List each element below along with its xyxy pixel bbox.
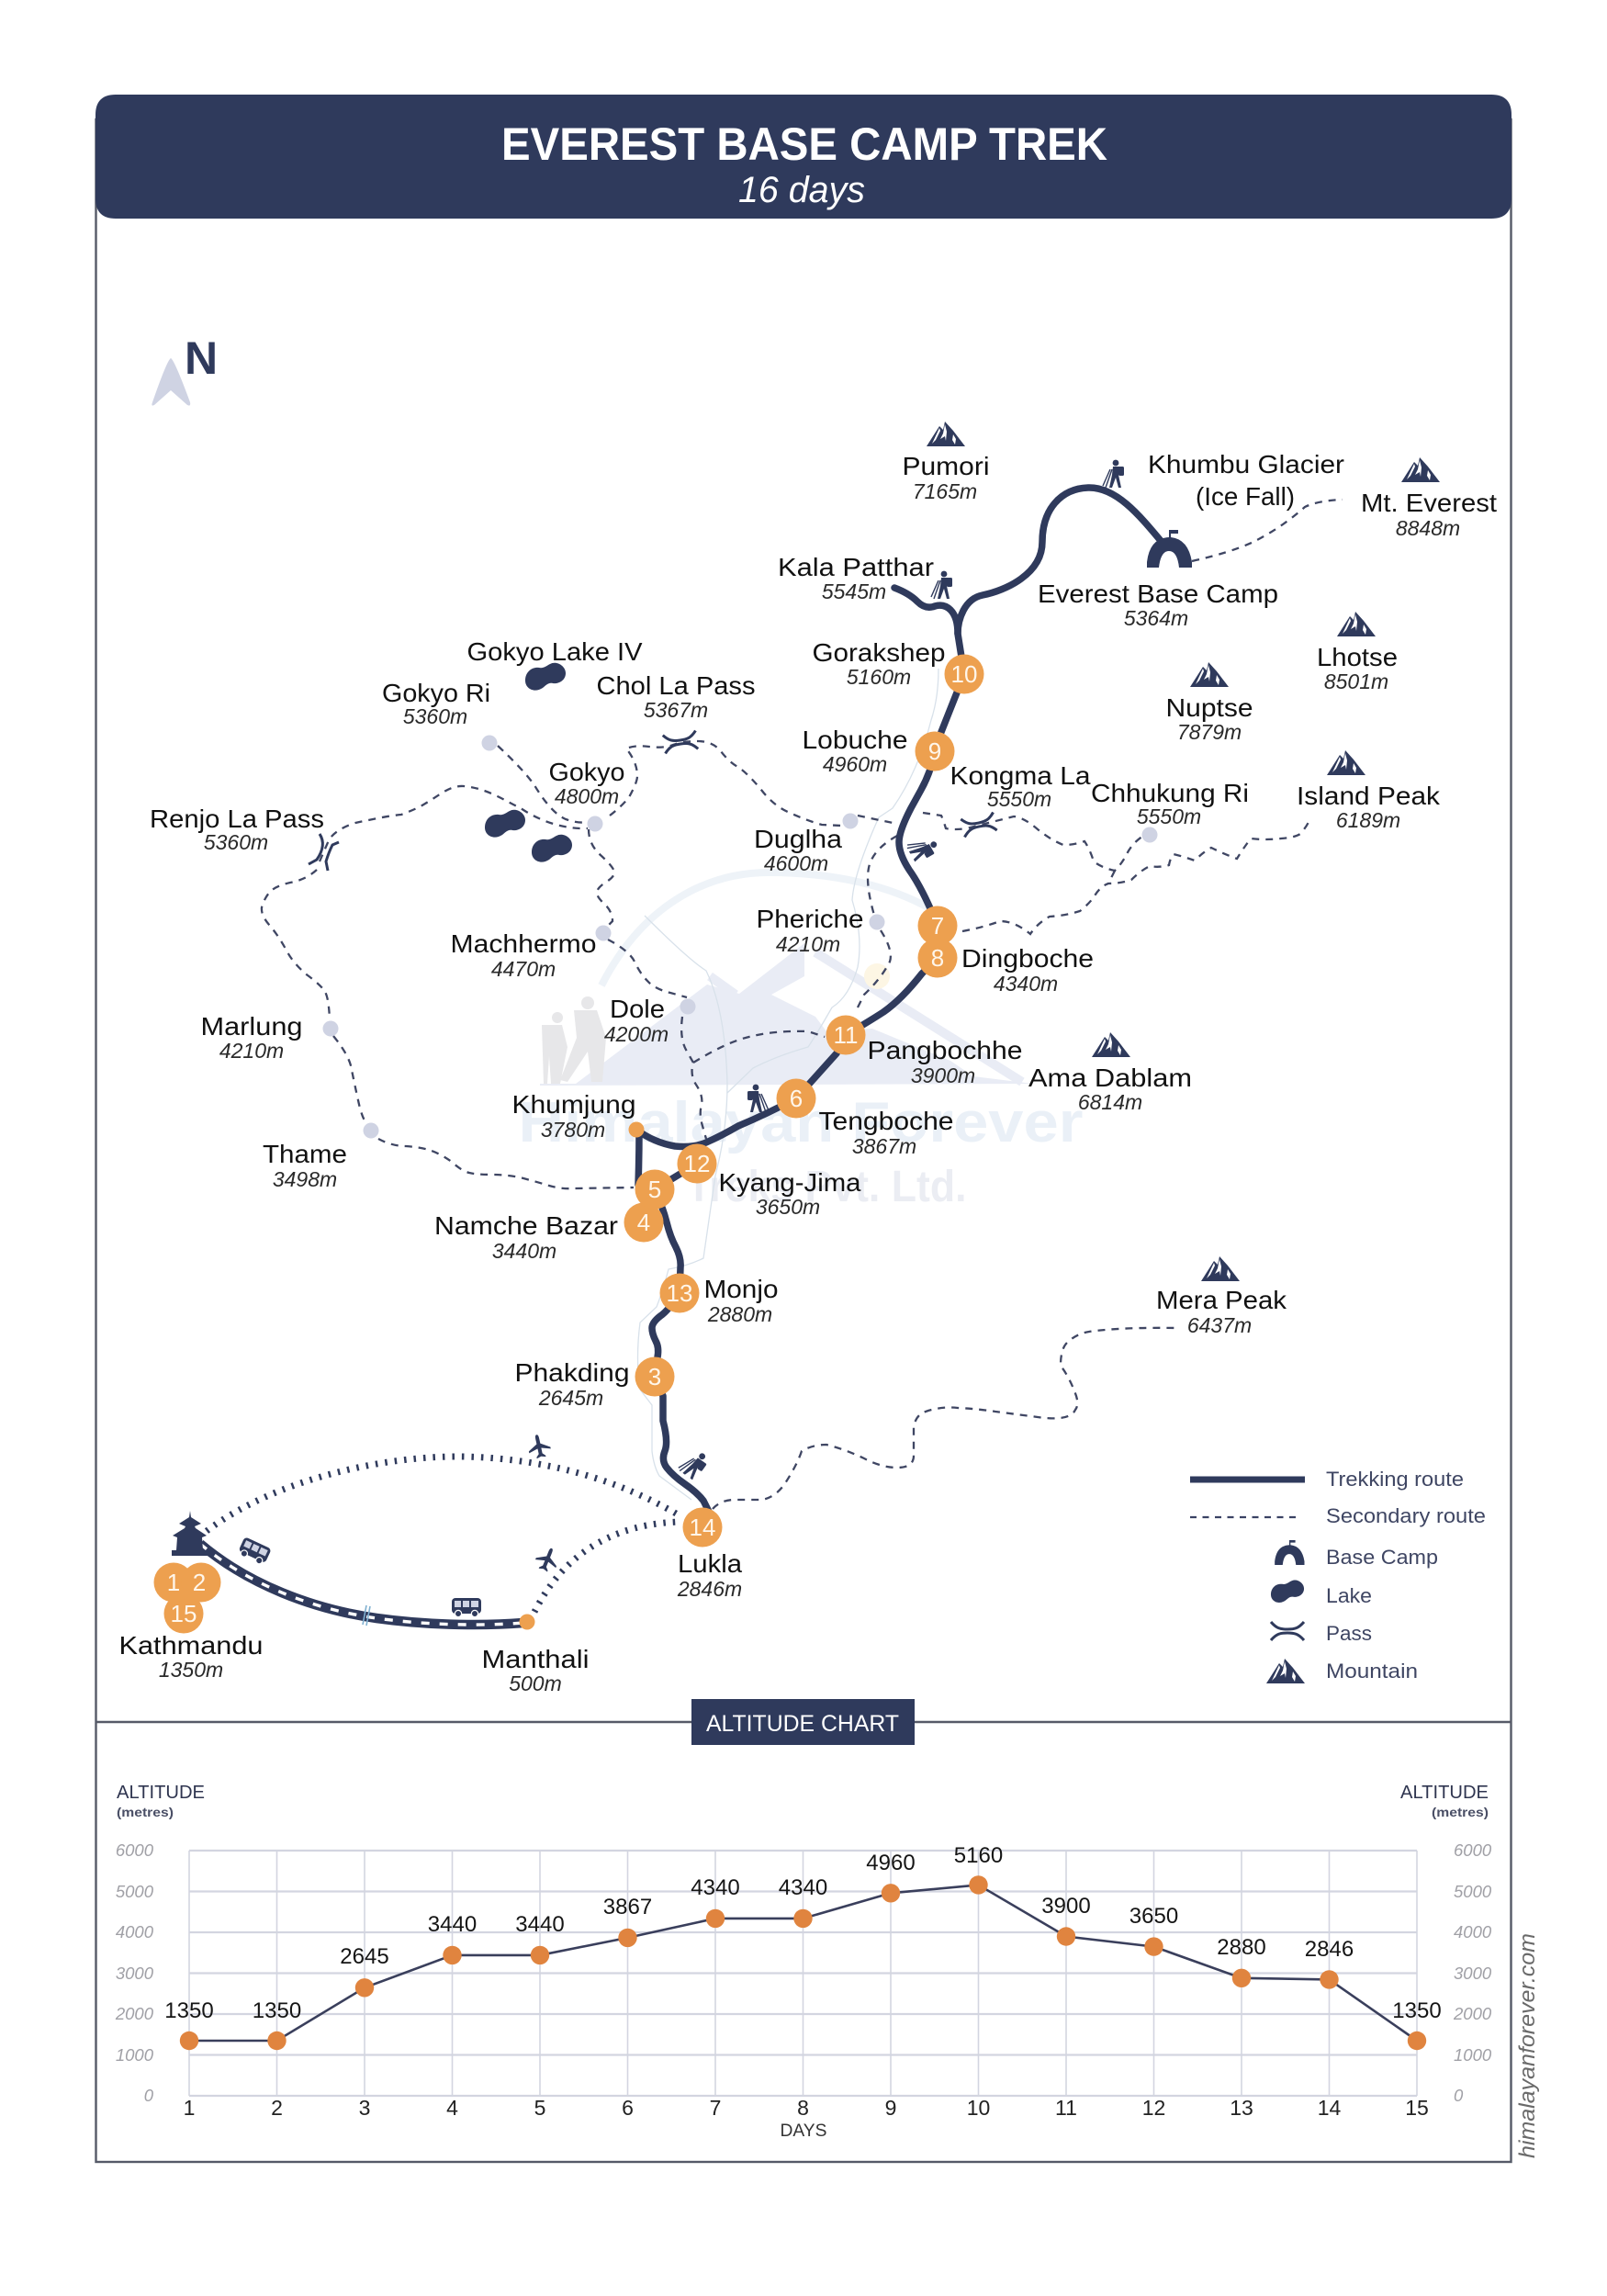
label: Island Peak: Island Peak [1297,782,1441,810]
legend: lake: Lake [1326,1584,1372,1607]
y axis labels left: 4000 [116,1922,154,1941]
y axis labels right [1453,1840,1492,2105]
label: Mt. Everest: Mt. Everest [1361,489,1497,517]
label: Khumbu Glacier: (Ice Fall) [1196,482,1295,511]
y axis labels left: 3000 [116,1964,154,1983]
route stops: 14 [690,1514,715,1541]
label: Kongma La: 5550m [987,787,1051,811]
label: Kala Patthar [778,553,934,603]
label: Pheriche: Pheriche [757,905,863,933]
altitude values: 3867 [603,1895,652,1919]
label: Lukla: Lukla [678,1549,742,1578]
legend: trekking route [1190,1468,1464,1491]
label: Pumori: 7165m [913,479,977,503]
label: Pheriche: 4210m [776,932,840,956]
label: Machhermo [450,929,597,981]
route stops: 8 [931,944,944,972]
label: Dole: 4200m [604,1022,669,1046]
label: Gokyo Ri [382,679,490,728]
day labels: 12 [1142,2096,1165,2120]
label: Dingboche [961,944,1094,996]
label: Lukla: 2846m [677,1577,742,1601]
label: Kathmandu [119,1631,263,1682]
label: Khumjung [512,1090,635,1142]
label: Manthali: Manthali [481,1645,590,1673]
route stops: 1 [167,1569,180,1596]
y axis labels right: 0 [1454,2086,1464,2105]
label: Mt. Everest [1361,489,1497,540]
label: Tengboche: Tengboche [819,1107,953,1135]
label: Dole: Dole [610,995,665,1023]
day labels: 2 [271,2096,283,2120]
label: Pheriche [757,905,863,956]
altitude values: 1350 [253,1998,301,2023]
label: Dingboche: 4340m [994,972,1058,996]
y axis labels left: 5000 [116,1882,154,1901]
label: Gokyo [549,758,624,808]
altitude values: 2846 [1305,1937,1354,1962]
route stops: 6 [790,1085,803,1112]
label: Gokyo Ri: Gokyo Ri [382,679,490,707]
route stops: 10 [951,660,977,688]
altitude values: 3900 [1041,1894,1091,1919]
altitude values: 4960 [866,1851,916,1875]
altitude values: 3650 [1129,1904,1178,1929]
label: Ama Dablam [1028,1064,1192,1114]
day labels: 3 [359,2096,370,2120]
label: Duglha [754,825,842,875]
y axis labels left: 1000 [116,2045,154,2065]
day labels: 15 [1405,2096,1429,2120]
label: Chhukung Ri: 5550m [1137,805,1201,828]
label: Gorakshep: Gorakshep [812,638,946,667]
label: Pangbochhe [867,1036,1023,1087]
legend [1190,1468,1486,1683]
label: Monjo: 2880m [707,1302,772,1326]
legend: lake [1271,1580,1372,1607]
map and altitude frame [96,119,1511,2162]
label: Gokyo: Gokyo [549,758,624,786]
y axis labels right: 6000 [1454,1840,1492,1860]
label: Nuptse: 7879m [1177,720,1242,744]
y axis labels left: 0 [144,2086,154,2105]
main trekking route [636,488,1162,1515]
label: Renjo La Pass: Renjo La Pass [150,805,324,833]
label: Tengboche: 3867m [852,1134,916,1158]
label: Pangbochhe: 3900m [911,1064,975,1087]
label: Chhukung Ri: Chhukung Ri [1091,779,1249,807]
day labels: 10 [967,2096,990,2120]
label: Lukla [677,1549,742,1601]
label: Khumjung: Khumjung [512,1090,635,1119]
route stops: 15 [171,1600,197,1627]
altitude values [164,1843,1442,2023]
altitude values: 1350 [164,1998,214,2023]
route stops: 2 [193,1569,206,1596]
title: EVEREST BASE CAMP TREK [501,118,1107,170]
label: Gorakshep [812,638,946,689]
road Kathmandu to Manthali [200,1544,523,1626]
label: Phakding [514,1358,630,1410]
day labels: 13 [1230,2096,1253,2120]
day labels: 4 [446,2096,458,2120]
altitude line [189,1885,1417,2041]
label: Kyang-Jima [718,1168,861,1219]
route stops: 11 [834,1021,858,1049]
route stops: 5 [648,1176,661,1203]
label: Chhukung Ri [1091,779,1249,828]
label: Lobuche [803,726,907,776]
label: Dole [604,995,669,1046]
icons: planes [526,1433,562,1574]
altitude values: 2645 [340,1944,389,1969]
watermark: logo and company name: Himalayan Forever [518,1091,1084,1154]
label: Lhotse: 8501m [1324,670,1388,693]
legend: mountain [1266,1659,1418,1683]
label: Gokyo Ri: 5360m [403,704,467,728]
watermark: logo and company name: Treks Pvt. Ltd. [687,1163,966,1211]
divider between map and chart [96,1721,1511,1723]
label: Mera Peak [1156,1286,1287,1337]
side spots [323,735,1157,1139]
day labels: 14 [1318,2096,1341,2120]
day labels: 6 [622,2096,634,2120]
label: Gokyo: 4800m [555,784,619,808]
header banner [96,95,1511,219]
north arrow: N [185,332,218,384]
label: Gorakshep: 5160m [847,665,911,689]
y axis labels left: 2000 [115,2004,154,2023]
label: Thame [263,1140,347,1191]
label: Pangbochhe: Pangbochhe [867,1036,1023,1064]
flight paths [207,1457,682,1612]
route stops: 13 [667,1279,692,1307]
label: Khumbu Glacier: Khumbu Glacier [1148,450,1344,478]
north arrow [152,332,218,406]
icon: Everest base camp [1147,530,1192,568]
altitude values: 1350 [1392,1998,1442,2023]
altitude chart heading [691,1699,915,1745]
label: Tengboche [819,1107,953,1158]
label: Mera Peak: 6437m [1187,1313,1252,1337]
label: Kongma La: Kongma La [950,761,1091,790]
altitude values: 4340 [779,1875,827,1900]
label: Nuptse [1166,693,1253,744]
label: Chol La Pass: Chol La Pass [597,671,755,700]
label: Renjo La Pass [150,805,324,854]
label: Marlung: Marlung [200,1012,303,1041]
altitude points [180,1875,1426,2050]
altitude values: 3440 [515,1912,565,1937]
legend: secondary route: Secondary route [1326,1504,1486,1527]
y axis labels right: 3000 [1454,1964,1492,1983]
label: Renjo La Pass: 5360m [204,830,268,854]
y axis labels right: 1000 [1454,2045,1492,2065]
icons: mountains [927,422,1440,1281]
label: Island Peak [1297,782,1441,832]
subtitle: 16 days [738,170,865,210]
icons: passes [309,731,997,871]
y axis labels left [115,1840,154,2105]
label: Machhermo: Machhermo [450,929,597,958]
legend: pass [1271,1622,1372,1645]
label: Manthali: 500m [509,1671,562,1695]
label: Lhotse: Lhotse [1317,643,1398,671]
label: Namche Bazar: Namche Bazar [434,1211,618,1240]
altitude axis title left: (metres) [117,1805,174,1819]
label: Duglha: Duglha [754,825,842,853]
legend: pass: Pass [1326,1622,1372,1645]
altitude values: 3440 [428,1912,477,1937]
legend: base camp [1275,1540,1438,1569]
altitude axis title right: ALTITUDE [1400,1783,1489,1803]
y axis labels right: 2000 [1453,2004,1492,2023]
label: Everest Base Camp [1038,580,1278,630]
label: Everest Base Camp: Everest Base Camp [1038,580,1278,608]
label: Pumori [902,452,990,503]
day labels: 8 [797,2096,809,2120]
y axis labels right: 5000 [1454,1882,1492,1901]
altitude values: 2880 [1217,1935,1266,1960]
label: Ama Dablam: 6814m [1078,1090,1142,1114]
label: Mt. Everest: 8848m [1396,516,1460,540]
label: Monjo [703,1275,779,1326]
legend: mountain: Mountain [1326,1660,1418,1683]
icons: trekkers [678,460,1124,1481]
day labels: 9 [885,2096,896,2120]
label: Khumjung: 3780m [541,1118,605,1142]
label: Kala Patthar: Kala Patthar [778,553,934,581]
legend: trekking route: Trekking route [1326,1468,1464,1491]
route stops: 9 [928,737,941,765]
label: Pumori: Pumori [902,452,990,480]
altitude values: 5160 [954,1843,1003,1868]
label: Chol La Pass: 5367m [644,698,708,722]
altitude axis title left: ALTITUDE [117,1783,205,1803]
day labels: 7 [710,2096,721,2120]
label: Dingboche: Dingboche [961,944,1094,973]
label: Marlung [200,1012,303,1063]
label: Khumbu Glacier [1148,450,1344,511]
route stops: 3 [648,1363,661,1390]
secondary routes [262,500,1343,1509]
day labels [184,2096,1429,2120]
label: Monjo: Monjo [703,1275,779,1303]
label: Manthali [481,1645,590,1695]
label: Chol La Pass [597,671,755,722]
route stops: 12 [684,1150,710,1177]
legend: base camp: Base Camp [1326,1546,1438,1569]
label: Marlung: 4210m [219,1039,284,1063]
label: Mera Peak: Mera Peak [1156,1286,1287,1314]
river [637,669,938,1500]
label: Nuptse: Nuptse [1166,693,1253,722]
route stops: 4 [637,1209,650,1236]
line chart [115,1840,1492,2141]
x axis title: DAYS [781,2122,826,2141]
icons: buses [237,1536,481,1617]
label: Gokyo Lake IV: Gokyo Lake IV [466,637,643,666]
label: Thame: Thame [263,1140,347,1168]
altitude chart heading: ALTITUDE CHART [706,1711,899,1737]
label: Island Peak: 6189m [1336,808,1400,832]
label: Namche Bazar: 3440m [492,1239,556,1263]
label: Namche Bazar [434,1211,618,1263]
label: Kongma La [950,761,1091,811]
label: Machhermo: 4470m [491,957,556,981]
chart grid [189,1851,1417,2096]
watermark: logo and company name [518,872,1084,1211]
label: Kala Patthar: 5545m [822,580,886,603]
route stops [154,654,984,1633]
icon: Kathmandu temple [172,1511,211,1556]
label: Ama Dablam: Ama Dablam [1028,1064,1192,1092]
label: Kathmandu: Kathmandu [119,1631,263,1660]
label: Lobuche: 4960m [823,752,887,776]
label: Duglha: 4600m [764,851,828,875]
label: Phakding: 2645m [538,1386,603,1410]
label: Kyang-Jima: 3650m [756,1195,820,1219]
label: Everest Base Camp: 5364m [1124,606,1188,630]
day labels: 5 [534,2096,545,2120]
label: Thame: 3498m [273,1167,337,1191]
website credit: himalayanforever.com [1515,1933,1540,2158]
day labels: 11 [1055,2096,1077,2120]
label: Lhotse [1317,643,1398,693]
altitude values: 4340 [691,1875,740,1900]
label: Kyang-Jima: Kyang-Jima [718,1168,861,1197]
y axis labels right: 4000 [1454,1922,1492,1941]
icons: lakes [485,663,572,862]
route stops: 7 [931,912,944,940]
y axis labels left: 6000 [116,1840,154,1860]
label: Lobuche: Lobuche [803,726,907,754]
altitude axis title right [1400,1783,1489,1819]
day labels: 1 [184,2096,195,2120]
altitude axis title right: (metres) [1432,1805,1489,1819]
label: Phakding: Phakding [514,1358,630,1387]
altitude axis title left [117,1783,205,1819]
label: Kathmandu: 1350m [159,1658,223,1682]
